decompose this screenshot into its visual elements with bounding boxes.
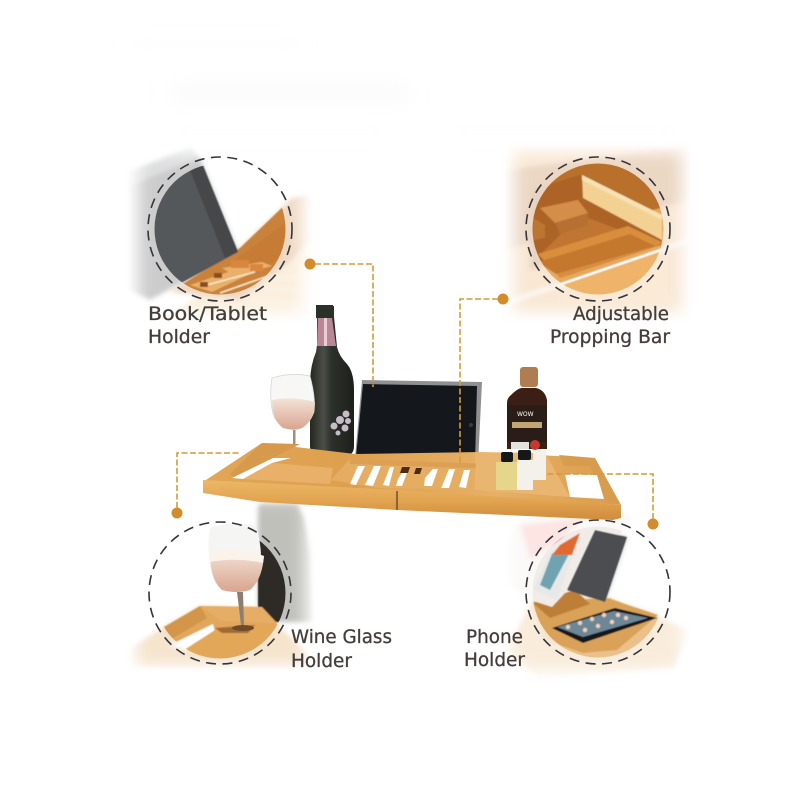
centre seam bbox=[396, 491, 398, 510]
left lower panel bbox=[243, 463, 333, 484]
panel: adjustable propping bar bbox=[500, 145, 690, 348]
toiletries bottle: shampoo: WOW bbox=[517, 411, 534, 418]
tray front face bbox=[203, 480, 621, 520]
panel: book/tablet holder bbox=[131, 149, 310, 344]
right centre panel bbox=[475, 452, 570, 497]
dashed circle: propping bar bbox=[526, 157, 670, 301]
label: wine glass holder: Holder bbox=[291, 650, 352, 672]
label: propping bar bbox=[550, 303, 670, 348]
panel: wine glass holder bbox=[130, 503, 392, 672]
faint top artifacts bbox=[130, 42, 680, 133]
detail photo: phone holder bbox=[532, 526, 658, 658]
faded photo: wine glass holder bbox=[130, 503, 313, 668]
label: propping bar: Adjustable bbox=[573, 303, 669, 325]
tray back rail bbox=[230, 443, 300, 478]
label: book/tablet holder bbox=[148, 303, 267, 348]
bath tray product bbox=[203, 305, 621, 520]
tablet bbox=[355, 380, 482, 464]
faded photo: book/tablet holder bbox=[131, 149, 310, 317]
toiletries bottle: shampoo bbox=[507, 367, 547, 480]
label: propping bar: Propping Bar bbox=[550, 326, 670, 348]
wine glass bbox=[271, 374, 315, 466]
dashed circle: book/tablet holder bbox=[148, 157, 292, 301]
detail photo: wine glass holder bbox=[164, 540, 286, 658]
label: wine glass holder bbox=[291, 626, 392, 672]
wine bottle bbox=[310, 305, 354, 456]
detail photo: book/tablet holder bbox=[154, 166, 286, 294]
label: phone holder: Holder bbox=[464, 649, 525, 671]
label: phone holder: Phone bbox=[466, 626, 523, 648]
label: book/tablet holder: Holder bbox=[148, 326, 210, 348]
right rail bbox=[559, 455, 621, 505]
faded photo: propping bar bbox=[500, 145, 690, 320]
connector: propping bar bbox=[460, 294, 508, 463]
connector: wine glass holder bbox=[172, 453, 240, 518]
label: book/tablet holder: Book/Tablet bbox=[148, 303, 267, 325]
label: wine glass holder: Wine Glass bbox=[291, 626, 392, 648]
dashed circle: phone holder bbox=[526, 520, 670, 664]
faded photo: phone holder bbox=[505, 512, 690, 680]
panel: phone holder bbox=[464, 512, 690, 680]
connector: phone holder bbox=[545, 474, 658, 530]
right handle slot bbox=[565, 474, 604, 499]
label: phone holder bbox=[464, 626, 525, 671]
dashed circle: wine glass holder bbox=[149, 522, 291, 664]
tray top surface bbox=[203, 443, 621, 505]
left handle slot bbox=[232, 458, 291, 479]
small bottles bbox=[496, 450, 533, 490]
connector: book/tablet holder bbox=[304, 258, 373, 387]
detail photo: propping bar bbox=[532, 164, 664, 294]
slatted centre section bbox=[331, 459, 476, 490]
enlarged wine glass bbox=[208, 523, 264, 631]
